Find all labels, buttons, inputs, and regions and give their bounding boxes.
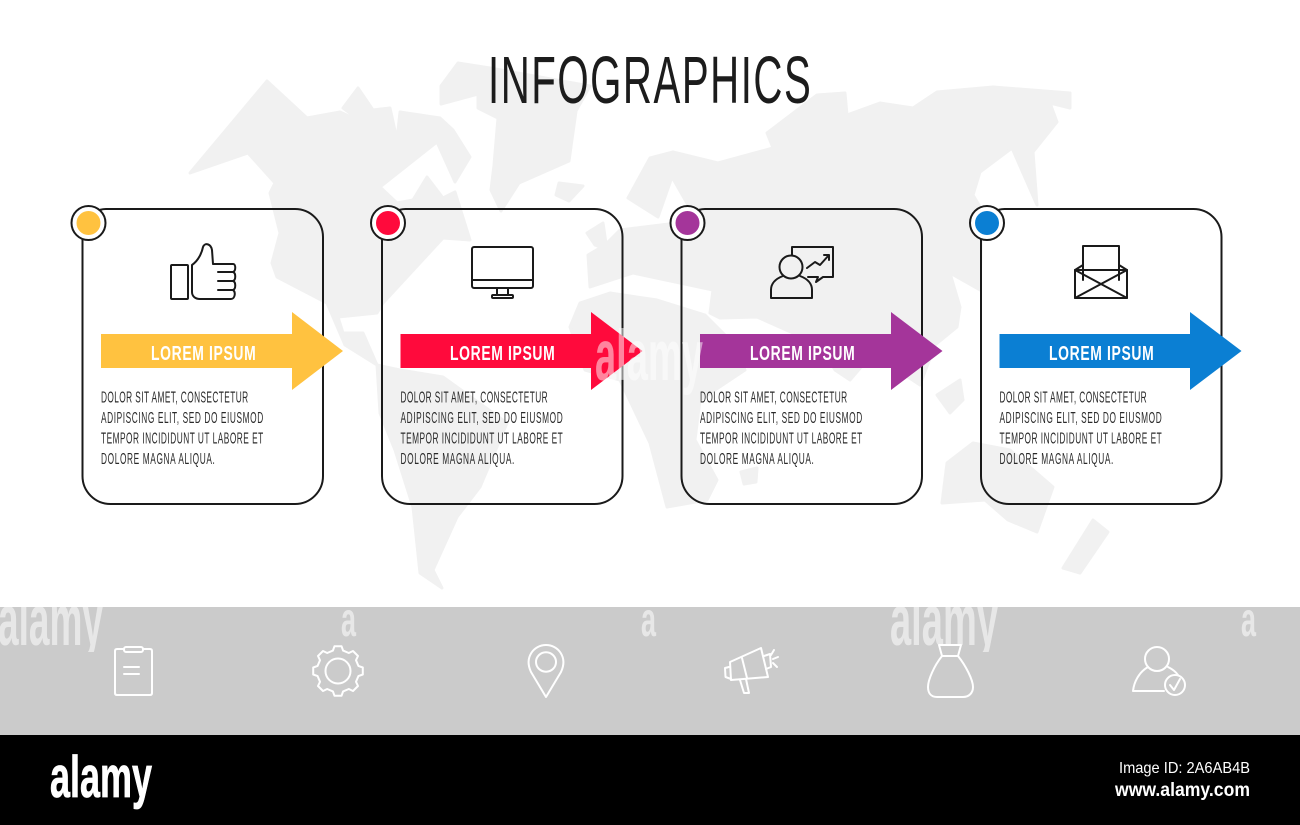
body text 1 — [101, 387, 263, 468]
icon: money sack — [928, 645, 973, 697]
body text 2: DOLOR SIT AMET, CONSECTETUR — [400, 387, 548, 406]
arrow banner 1 — [101, 312, 343, 390]
world map background — [190, 63, 1108, 588]
card outline 3 — [682, 209, 922, 504]
arrow banner 2 — [400, 312, 642, 390]
icon: thumbs up — [171, 244, 235, 299]
marker dot 3 — [670, 206, 704, 240]
icon: verified user — [1133, 647, 1185, 695]
body text 3 — [700, 387, 862, 468]
icon: clipboard — [115, 647, 152, 695]
footer image id: Image ID: 2A6AB4B — [1119, 760, 1250, 777]
heading 4: LOREM IPSUM — [1049, 341, 1154, 365]
black footer bar — [0, 735, 1300, 825]
body text 3: ADIPISCING ELIT, SED DO EIUSMOD — [700, 408, 862, 427]
footer logo: alamy — [50, 745, 152, 810]
icon: gear — [313, 646, 363, 696]
body text 3: TEMPOR INCIDIDUNT UT LABORE ET — [700, 428, 862, 447]
body text 1: ADIPISCING ELIT, SED DO EIUSMOD — [101, 408, 263, 427]
watermark: small marks: a — [341, 594, 356, 647]
icon: desktop monitor — [472, 247, 533, 298]
icon: open envelope — [1075, 246, 1127, 298]
panel: card 1 — [72, 206, 343, 504]
arrow banner 4 — [1000, 312, 1242, 390]
panel: card 4 — [970, 206, 1242, 504]
arrow banner 3 — [700, 312, 942, 390]
watermark: centre: alamy — [595, 317, 703, 396]
icon: megaphone — [725, 648, 778, 693]
icon: location pin — [529, 645, 563, 697]
panel: card 3 — [670, 206, 942, 504]
body text 4: ADIPISCING ELIT, SED DO EIUSMOD — [1000, 408, 1162, 427]
body text 3: DOLORE MAGNA ALIQUA. — [700, 449, 814, 468]
watermark: band left: alamy — [0, 581, 103, 661]
icon: presenter with chart — [771, 247, 833, 298]
body text 1: TEMPOR INCIDIDUNT UT LABORE ET — [101, 428, 263, 447]
body text 4: TEMPOR INCIDIDUNT UT LABORE ET — [1000, 428, 1162, 447]
title: INFOGRAPHICS — [488, 42, 811, 118]
body text 2: DOLORE MAGNA ALIQUA. — [400, 449, 514, 468]
body text 2: TEMPOR INCIDIDUNT UT LABORE ET — [400, 428, 563, 447]
body text 2 — [400, 387, 563, 468]
body text 2: ADIPISCING ELIT, SED DO EIUSMOD — [400, 408, 563, 427]
body text 4 — [1000, 387, 1162, 468]
marker dot 2 — [371, 206, 405, 240]
marker dot 4 — [970, 206, 1004, 240]
card outline 1 — [82, 209, 323, 504]
watermark: band right: alamy — [890, 581, 998, 661]
footer website: www.alamy.com — [1114, 780, 1250, 801]
heading 2: LOREM IPSUM — [450, 341, 555, 365]
body text 1: DOLOR SIT AMET, CONSECTETUR — [101, 387, 248, 406]
watermark: small marks — [341, 594, 1256, 647]
watermark: small marks: a — [1241, 594, 1256, 647]
body text 1: DOLORE MAGNA ALIQUA. — [101, 449, 215, 468]
body text 4: DOLORE MAGNA ALIQUA. — [1000, 449, 1113, 468]
grey icon band — [0, 607, 1300, 735]
heading 1: LOREM IPSUM — [151, 341, 256, 365]
body text 4: DOLOR SIT AMET, CONSECTETUR — [1000, 387, 1147, 406]
marker dot 1 — [72, 206, 106, 240]
panel: card 2 — [371, 206, 642, 504]
body text 3: DOLOR SIT AMET, CONSECTETUR — [700, 387, 847, 406]
card outline 4 — [981, 209, 1222, 504]
heading 3: LOREM IPSUM — [750, 341, 855, 365]
card outline 2 — [382, 209, 622, 504]
watermark: small marks: a — [641, 594, 656, 647]
